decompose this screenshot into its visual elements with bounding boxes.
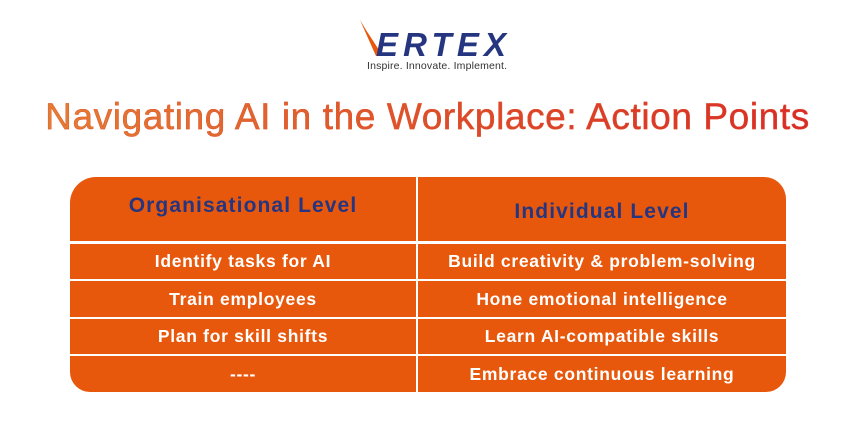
header: organisational: Organisational Level bbox=[129, 194, 357, 217]
row 2 bbox=[70, 281, 416, 317]
header: individual bbox=[418, 177, 786, 241]
table: Learn AI-compatible skills bbox=[485, 326, 719, 346]
row 1: Identify tasks for AI bbox=[155, 251, 331, 271]
table: Embrace continuous learning bbox=[470, 364, 734, 384]
table: Build creativity & problem-solving bbox=[448, 251, 756, 271]
row 2: Train employees bbox=[169, 288, 317, 308]
table bbox=[70, 177, 786, 392]
header: individual: Individual Level bbox=[514, 200, 690, 223]
header: organisational bbox=[70, 177, 416, 241]
logo bbox=[360, 20, 508, 72]
title: Navigating AI in the Workplace: Action Points bbox=[45, 96, 810, 137]
row 4 bbox=[70, 356, 416, 392]
row 1 bbox=[70, 244, 416, 279]
row 4: ---- bbox=[230, 364, 256, 384]
logo: ERTEX bbox=[376, 26, 508, 63]
logo: Inspire. Innovate. Implement. bbox=[367, 60, 507, 72]
row 3: Plan for skill shifts bbox=[158, 326, 328, 346]
icon: V mark bbox=[360, 20, 383, 56]
table: Hone emotional intelligence bbox=[476, 288, 728, 308]
row 3 bbox=[70, 319, 416, 354]
